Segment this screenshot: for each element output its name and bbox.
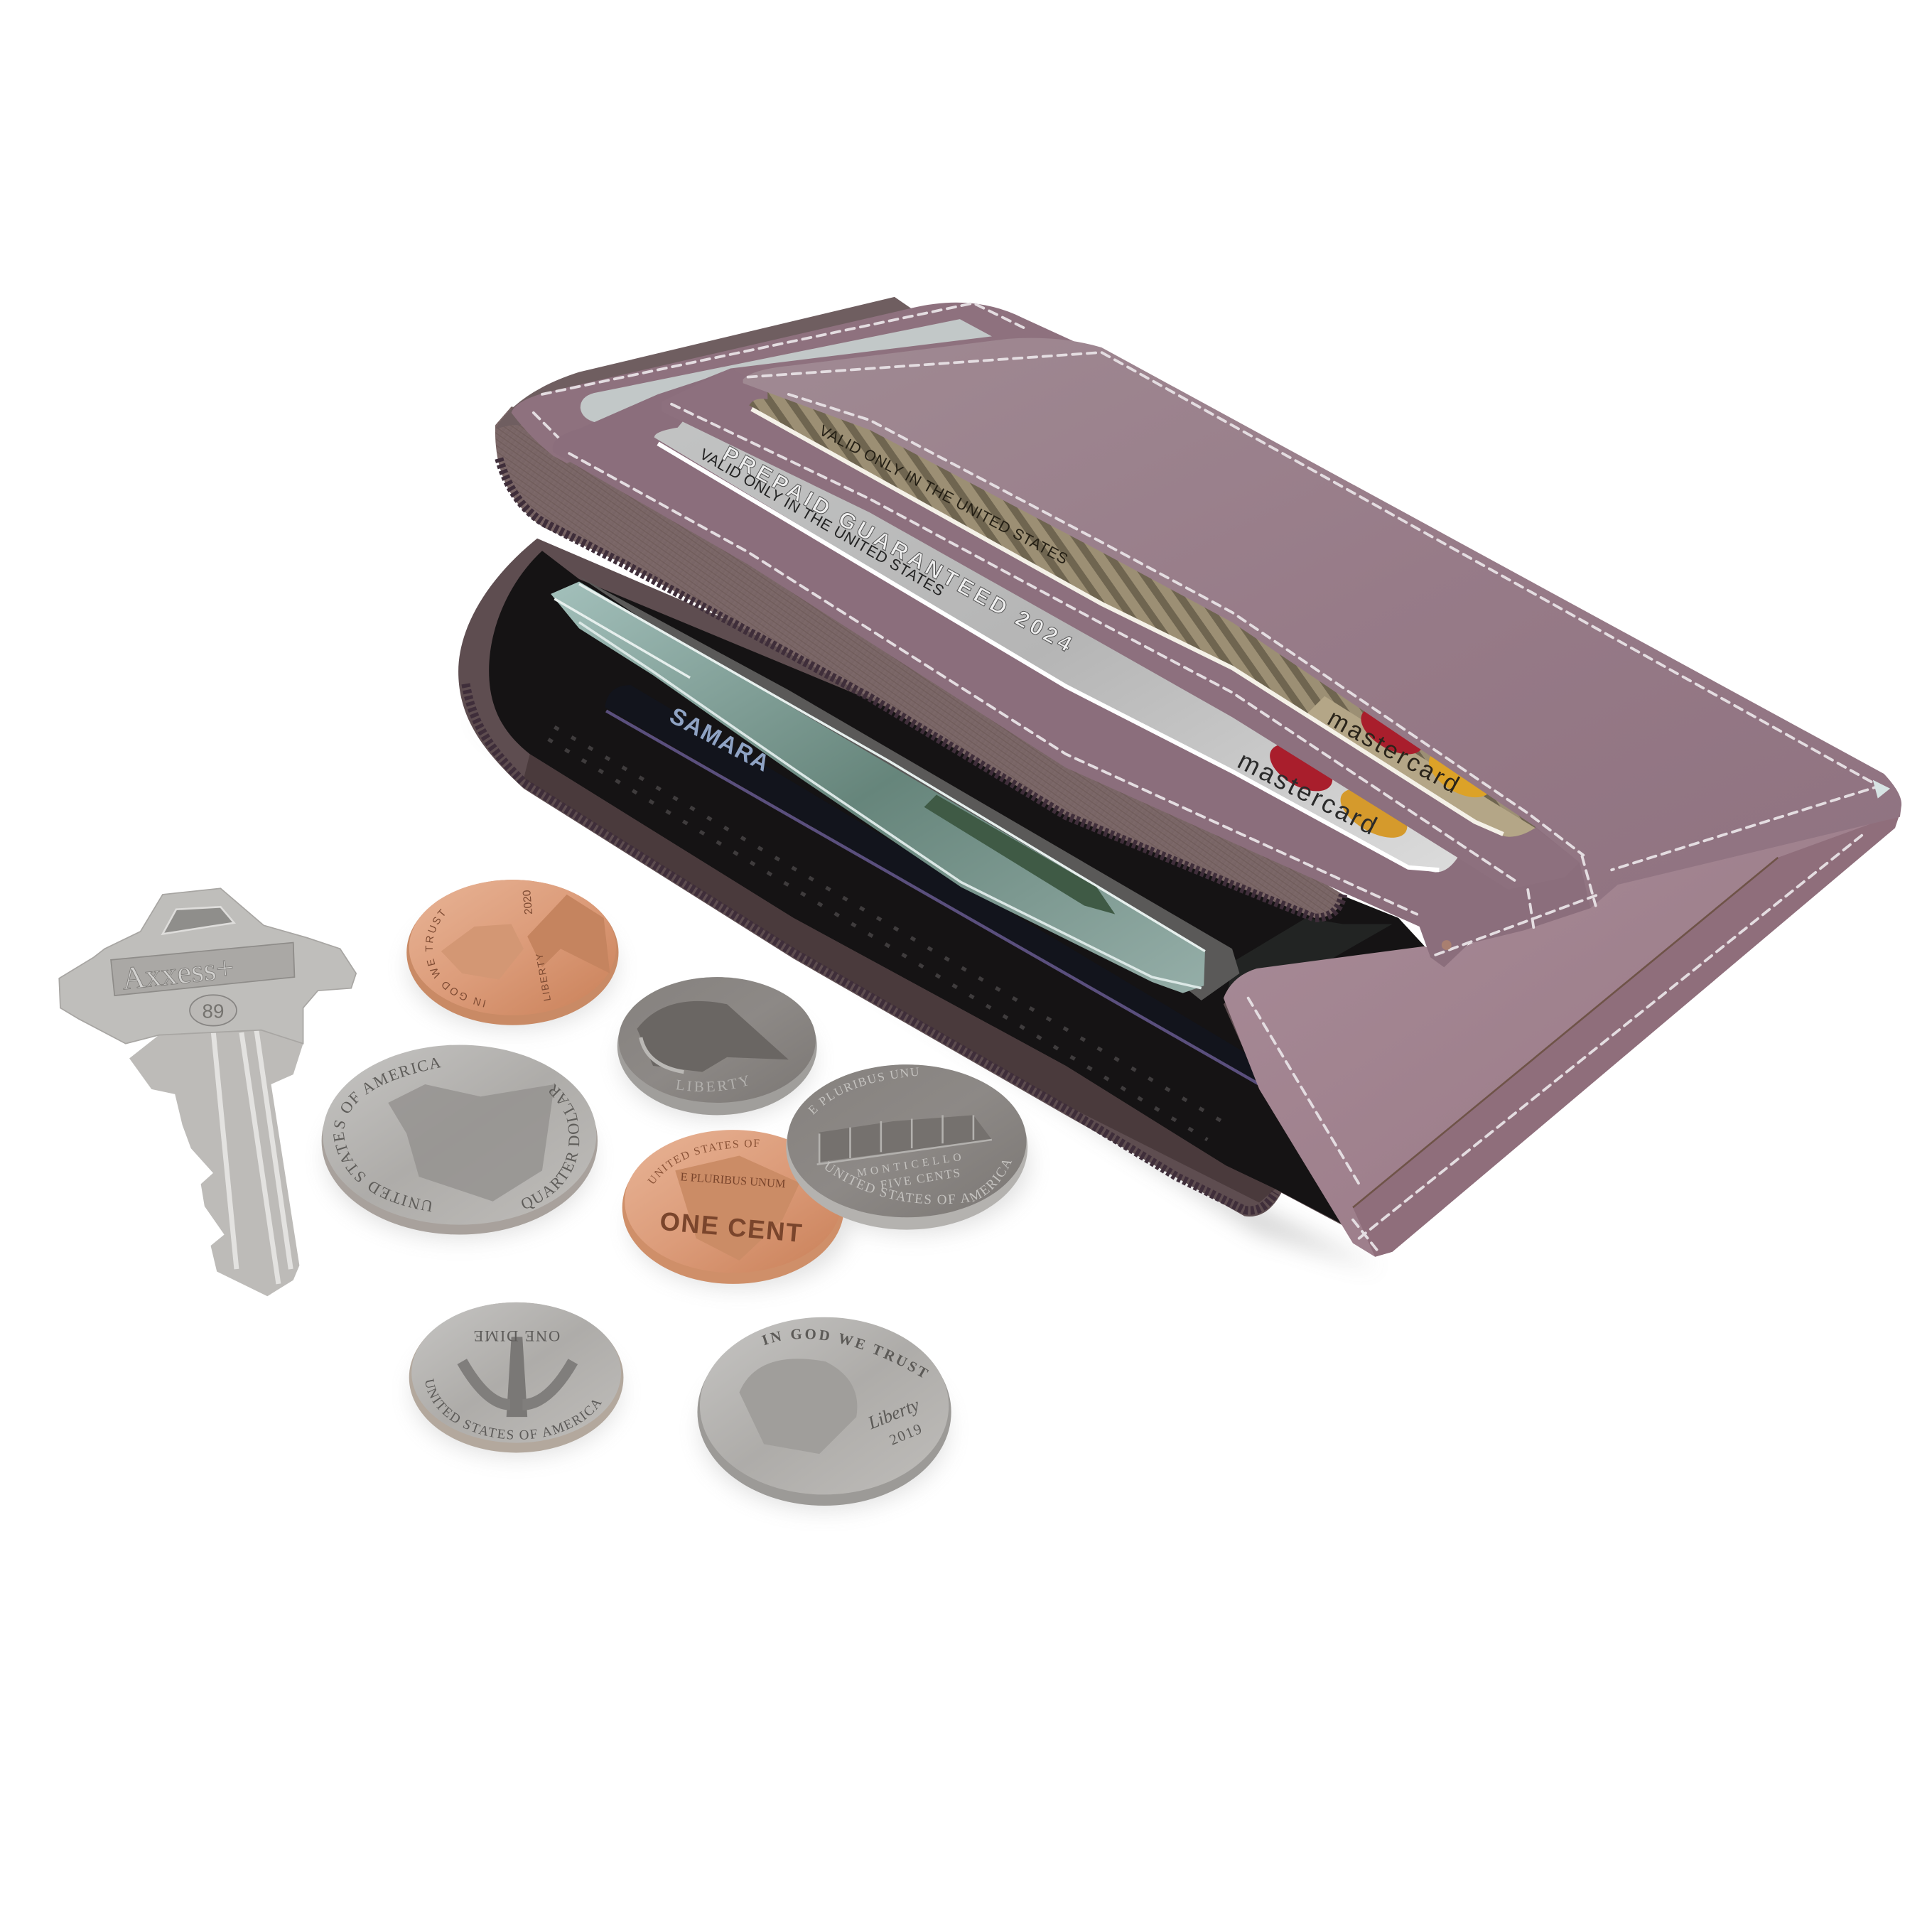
back panel [512, 303, 1109, 463]
key brand [111, 943, 294, 996]
lower slot lip stitching [569, 453, 1602, 955]
penny top [406, 880, 618, 1025]
penny center: E PLURIBUS UNUM [680, 1170, 786, 1191]
dime bottom [409, 1302, 624, 1452]
dime bottom: UNITED STATES OF AMERICA [425, 1378, 603, 1440]
nickel right [786, 1064, 1027, 1230]
nickel right: UNITED STATES OF AMERICA [826, 1161, 1012, 1204]
gold credit card: mastercard [1323, 705, 1465, 800]
upper zipper teeth [499, 458, 1343, 918]
silver credit card: PREPAID GUARANTEED 2024 [718, 441, 1079, 659]
dime bottom: ONE DIME [473, 1327, 560, 1345]
nickel right: MONTICELLO [856, 1150, 966, 1180]
key hole [163, 907, 234, 934]
dark card: SAMARA [666, 702, 775, 777]
wallet [458, 297, 1901, 1269]
dark card [605, 685, 1259, 1084]
black lining interior [489, 551, 1430, 1230]
top zipper edge [495, 297, 914, 428]
upper zipper fabric band [465, 406, 1343, 1211]
key blade [129, 1022, 303, 1296]
key brand: Axxess+ [120, 949, 236, 996]
nickel bottom: IN GOD WE TRUST [762, 1329, 929, 1378]
coin shadows [327, 906, 1029, 1509]
dime top [617, 977, 817, 1116]
soft shadow under wallet [462, 715, 1380, 1269]
gold credit card: VALID ONLY IN THE UNITED STATES [816, 422, 1071, 568]
quarter: UNITED STATES OF AMERICA [333, 1057, 442, 1212]
elastic lining stitches [549, 727, 1232, 1140]
silver credit card: mastercard [1234, 745, 1383, 841]
key blade grooves [213, 1029, 291, 1284]
key [59, 888, 356, 1296]
right fold flap [1224, 807, 1900, 1257]
key number: 89 [203, 1000, 224, 1022]
silver credit card [654, 413, 1467, 873]
nickel bottom: Liberty [864, 1394, 922, 1433]
gold credit card [749, 382, 1536, 837]
penny center: ONE CENT [659, 1207, 804, 1248]
quarter [321, 1045, 598, 1235]
penny top: 2020 [521, 889, 535, 915]
penny top: LIBERTY [533, 951, 553, 1002]
nickel right: E PLURIBUS UNUM [807, 1067, 919, 1115]
back panel stitching [534, 303, 1029, 446]
nickel right: FIVE CENTS [880, 1166, 962, 1192]
penny center [622, 1130, 843, 1284]
silver credit card: VALID ONLY IN THE UNITED STATES [697, 446, 947, 600]
corner rivet [1442, 940, 1452, 950]
penny center: UNITED STATES OF [647, 1140, 759, 1184]
lower zipper teeth [465, 684, 1275, 1211]
dime top: LIBERTY [676, 1075, 748, 1091]
key head [59, 888, 356, 1044]
coins [321, 880, 1035, 1516]
nickel bottom: 2019 [887, 1420, 925, 1449]
top card [581, 319, 992, 423]
cash bills [551, 577, 1392, 1004]
quarter: QUARTER DOLLAR [522, 1083, 580, 1209]
penny top: IN GOD WE TRUST [425, 908, 486, 1008]
nickel bottom [698, 1317, 951, 1506]
lower fabric strip [524, 754, 1275, 1202]
middle card slot strip [662, 368, 1580, 890]
card slot panel [553, 369, 1602, 967]
main leather flap [743, 338, 1901, 908]
key number [190, 995, 237, 1026]
lower zipper band [458, 539, 1355, 1232]
